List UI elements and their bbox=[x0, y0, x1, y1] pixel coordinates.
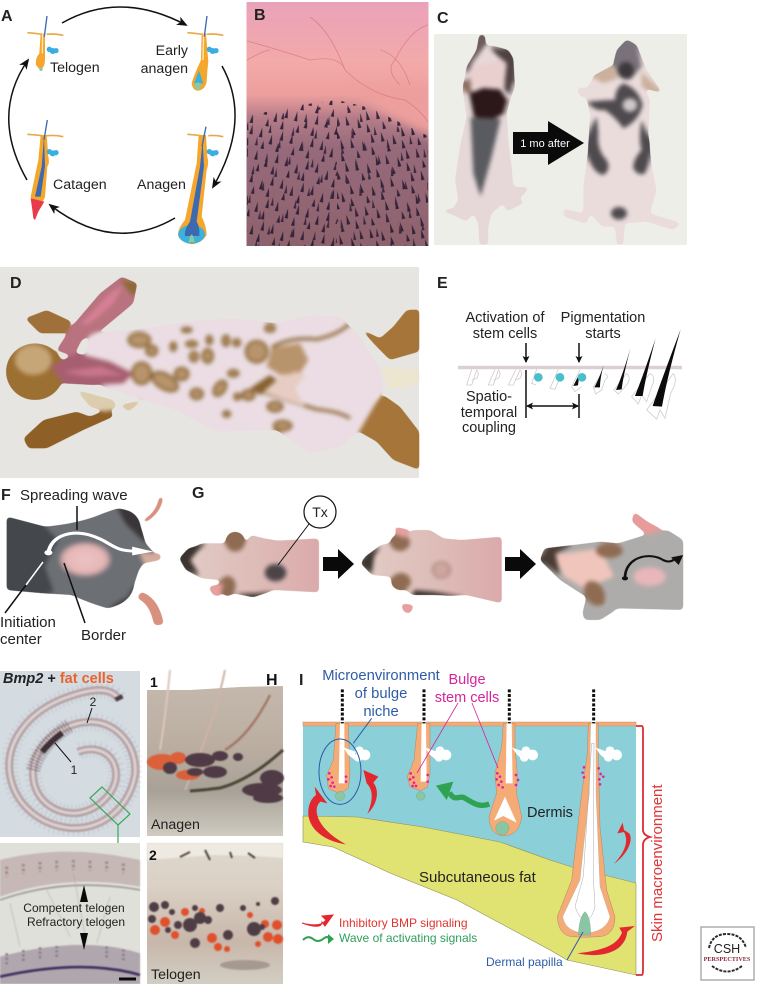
white wave arrow bbox=[44, 533, 153, 555]
panel I: skin macroenvironment schematic bbox=[299, 668, 666, 975]
mouse 1 bbox=[179, 532, 319, 597]
panel letter H: H bbox=[266, 672, 278, 689]
green arrow to inset bbox=[115, 825, 121, 852]
epidermis line bbox=[458, 366, 682, 369]
label: microenvironment of bulge niche: niche bbox=[363, 704, 399, 720]
Tx callout bbox=[278, 496, 336, 565]
label 2: 2 bbox=[90, 695, 97, 709]
panel letter C: C bbox=[437, 10, 449, 27]
label: spatio-temporal coupling: Spatio- bbox=[466, 389, 512, 405]
photo background bbox=[434, 34, 687, 245]
skin spiral bbox=[9, 690, 135, 828]
follicle: telogen bbox=[27, 16, 63, 71]
legend text: inhibitory: Inhibitory BMP signaling bbox=[339, 916, 468, 930]
epidermis bbox=[303, 722, 636, 726]
photo background bbox=[0, 267, 419, 478]
wave front bbox=[272, 325, 348, 347]
legend text: activating: Wave of activating signals bbox=[339, 931, 477, 945]
pink upper-right area bbox=[364, 98, 428, 141]
label: Anagen: Anagen bbox=[137, 177, 186, 193]
label: telogen: Telogen bbox=[151, 967, 201, 983]
panel letter I: I bbox=[299, 672, 303, 689]
arrow between mice 2 and 3 bbox=[505, 549, 536, 579]
whole mount photo bbox=[0, 671, 140, 837]
arrow label: 1 mo after bbox=[520, 138, 570, 150]
follicle 3 bbox=[489, 689, 538, 836]
label: pigmentation starts: starts bbox=[585, 326, 621, 342]
hair wave: right bbox=[337, 100, 428, 246]
panel letter A: A bbox=[1, 8, 13, 25]
panel letter D: D bbox=[10, 275, 22, 292]
label: anagen: Anagen bbox=[151, 817, 200, 833]
green inset box bbox=[90, 787, 130, 825]
label: microenvironment of bulge niche: Microenvironment bbox=[322, 668, 440, 684]
detail photo 2: telogen bbox=[147, 843, 283, 984]
head bbox=[6, 343, 64, 400]
label: bulge stem cells: stem cells bbox=[435, 690, 499, 706]
panel D: rabbit photo bbox=[0, 267, 419, 478]
label: dermal papilla: Dermal papilla bbox=[486, 955, 563, 969]
label: refractory telogen: Refractory telogen bbox=[27, 915, 125, 929]
rabbit bbox=[6, 277, 419, 470]
label: Catagen: Catagen bbox=[53, 177, 107, 193]
timing lines and arrows bbox=[526, 343, 579, 418]
veins bbox=[247, 17, 428, 122]
double arrows bbox=[80, 885, 88, 950]
panel E: spatio-temporal coupling bbox=[437, 275, 682, 436]
label: Early anagen: anagen bbox=[141, 61, 188, 77]
green wave arrow bbox=[436, 782, 489, 805]
panel letter B: B bbox=[254, 7, 266, 24]
panel A: hair cycle diagram bbox=[1, 7, 235, 244]
label: subcutaneous fat: Subcutaneous fat bbox=[419, 869, 537, 886]
label: initiation center: Initiation bbox=[0, 614, 56, 631]
follicle row bbox=[467, 329, 681, 419]
label: spreading wave: Spreading wave bbox=[20, 487, 128, 504]
hind feet bbox=[360, 309, 419, 360]
panel C: mouse photos bbox=[434, 10, 687, 245]
mouse 2 bbox=[361, 527, 502, 614]
label: skin macroenvironment: Skin macroenvironment bbox=[649, 784, 666, 942]
label: activation of stem cells: Activation of bbox=[466, 310, 545, 326]
hair patches bbox=[129, 325, 291, 430]
panel B: skin photo with hair wave bbox=[246, 2, 440, 246]
mouse 3 bbox=[540, 512, 683, 620]
follicle: early anagen bbox=[187, 16, 223, 91]
body bbox=[83, 315, 383, 453]
arrow: 1 mo after bbox=[513, 121, 584, 165]
red arrows in dermis and fat bbox=[577, 823, 635, 955]
red inhibitory arrows bbox=[308, 770, 378, 844]
label: spatio-temporal coupling: temporal bbox=[461, 405, 517, 421]
bulge stem cell leaders bbox=[417, 703, 498, 773]
label 1: 1 bbox=[150, 674, 158, 690]
legend: inhibitory bbox=[302, 915, 468, 930]
panel G: mouse series with Tx bbox=[179, 485, 683, 620]
label: initiation center: center bbox=[0, 631, 42, 648]
cycle arrows bbox=[9, 7, 235, 233]
follicle: anagen bbox=[178, 127, 223, 244]
label: Early anagen: Early bbox=[156, 43, 189, 59]
ears bbox=[57, 277, 137, 357]
panel letter F: F bbox=[1, 487, 11, 504]
legend: activating wave bbox=[303, 931, 477, 945]
leader lines bbox=[5, 506, 85, 623]
label 1: 1 bbox=[71, 763, 78, 777]
panel H: whole mount skin and details bbox=[0, 670, 284, 984]
follicle 2 bbox=[407, 689, 451, 800]
label: pigmentation starts: Pigmentation bbox=[561, 310, 645, 326]
panel F: spreading wave on mouse bbox=[0, 487, 161, 648]
photo background bbox=[246, 2, 428, 246]
detail photo 1: anagen bbox=[147, 670, 284, 836]
PERSPECTIVES wordmark: PERSPECTIVES bbox=[704, 956, 751, 963]
dermal papilla leader bbox=[567, 932, 583, 960]
black wave arrow bbox=[622, 555, 683, 580]
niche oval and leader bbox=[319, 718, 372, 804]
panel letter G: G bbox=[192, 485, 204, 502]
helix rope bbox=[709, 934, 746, 972]
labels and lines bbox=[55, 708, 92, 762]
label 2: 2 bbox=[149, 847, 157, 863]
mouse after bbox=[563, 39, 682, 245]
dermis layer bbox=[303, 725, 636, 883]
label: microenvironment of bulge niche: of bulge bbox=[355, 686, 407, 702]
label: activation of stem cells: stem cells bbox=[473, 326, 537, 342]
mouse before bbox=[440, 34, 530, 245]
label: bulge stem cells: Bulge bbox=[448, 672, 486, 688]
follicle 4 bbox=[557, 689, 622, 937]
label: dermis: Dermis bbox=[527, 805, 573, 821]
subcutaneous fat layer bbox=[303, 816, 636, 975]
label: spatio-temporal coupling: coupling bbox=[462, 420, 516, 436]
fore foot bbox=[23, 408, 113, 448]
arrow between mice 1 and 2 bbox=[323, 549, 354, 579]
follicle: catagen bbox=[27, 120, 63, 220]
label: border: Border bbox=[81, 627, 126, 644]
hair wave: left bbox=[247, 100, 337, 246]
inset photo bbox=[0, 843, 140, 984]
panel letter E: E bbox=[437, 275, 448, 292]
Tx label: Tx bbox=[312, 504, 328, 520]
CSH Perspectives logo bbox=[701, 927, 754, 980]
label: Telogen: Telogen bbox=[50, 60, 100, 76]
mouse photo bbox=[7, 497, 161, 625]
label: competent telogen: Competent telogen bbox=[23, 901, 125, 915]
title: Bmp2 + fat cells: Bmp2 + fat cells bbox=[3, 671, 114, 687]
skin bracket bbox=[636, 726, 650, 975]
scale bar bbox=[119, 978, 136, 980]
CSH wordmark: CSH bbox=[714, 942, 740, 956]
follicle 1 bbox=[327, 689, 370, 801]
